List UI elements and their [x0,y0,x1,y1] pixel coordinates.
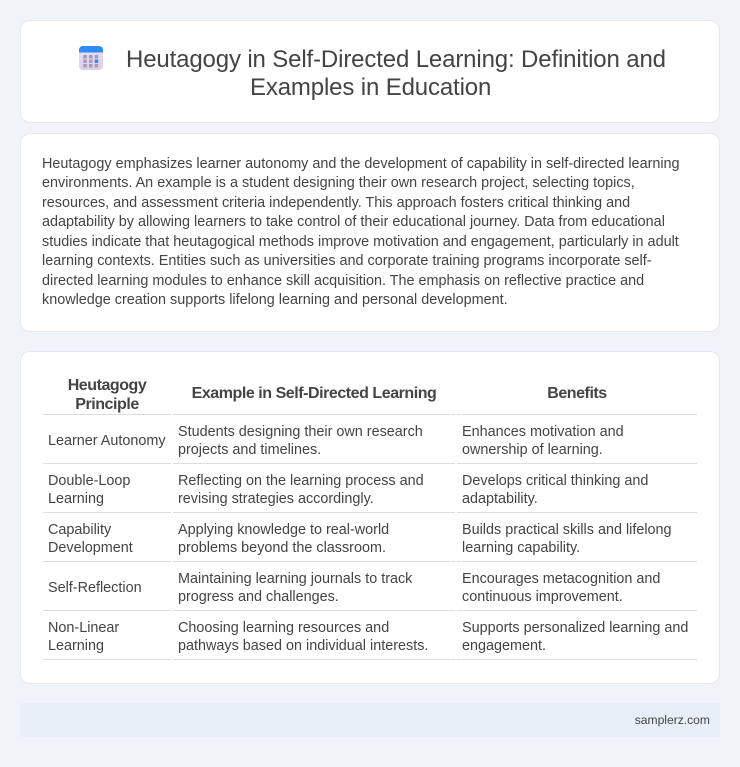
row: learner autonomy: Learner Autonomy [48,433,166,449]
row: self-reflection: Maintaining learning journals to track [178,571,412,587]
row: non-linear learning: Learning [48,638,104,654]
row: double-loop learning: adaptability. [462,491,538,507]
table panel [20,351,720,684]
intro paragraph: directed learning modules to enhance skill acquisition. The emphasis on reflective practice and [42,273,644,289]
row: double-loop learning: Develops critical thinking and [462,473,648,489]
row: self-reflection [48,571,660,605]
row: double-loop learning [48,473,648,507]
footer bar [20,703,720,737]
title: Examples in Education [250,74,491,101]
row: capability development: learning capability. [462,540,580,556]
row: self-reflection: progress and challenges. [178,589,339,605]
table header: Principle [75,396,139,413]
row: learner autonomy [48,424,624,458]
intro paragraph: environments. An example is a student designing their own research project, selecting topics, [42,175,635,191]
row: double-loop learning: Double-Loop [48,473,130,489]
intro paragraph: Heutagogy emphasizes learner autonomy and the development of capability in self-directed learning [42,156,680,172]
row: capability development [48,522,672,556]
table header: Example in Self-Directed Learning [192,385,436,402]
intro paragraph [42,156,680,308]
row: self-reflection: continuous improvement. [462,589,623,605]
row: non-linear learning: Supports personalized learning and [462,620,688,636]
row: non-linear learning: Choosing learning resources and [178,620,389,636]
row: learner autonomy: Students designing their own research [178,424,423,440]
intro paragraph: adaptability by allowing learners to take control of their educational journey. Data from educational [42,214,665,230]
row: learner autonomy: projects and timelines. [178,442,321,458]
intro paragraph: studies indicate that heutagogical methods improve motivation and engagement, particularly in adult [42,234,679,250]
row: non-linear learning: pathways based on individual interests. [178,638,428,654]
intro paragraph: resources, and assessment criteria independently. This approach fosters critical thinking and [42,195,630,211]
row: self-reflection: Encourages metacognition and [462,571,660,587]
intro panel [20,133,720,332]
row: capability development: Builds practical skills and lifelong [462,522,672,538]
row: double-loop learning: Reflecting on the learning process and [178,473,424,489]
table header [68,377,607,413]
row dividers [43,414,697,660]
row: capability development: Applying knowledge to real-world [178,522,389,538]
icon: calendar [79,46,103,70]
row: learner autonomy: Enhances motivation and [462,424,624,440]
row: non-linear learning: engagement. [462,638,546,654]
row: capability development: Capability [48,522,111,538]
table header: Heutagogy [68,377,146,394]
intro paragraph: learning contexts. Entities such as universities and corporate training programs incorporate self- [42,253,652,269]
table header: Benefits [547,385,607,402]
row: capability development: problems beyond the classroom. [178,540,386,556]
row: double-loop learning: revising strategies accordingly. [178,491,374,507]
row: non-linear learning: Non-Linear [48,620,119,636]
row: learner autonomy: ownership of learning. [462,442,603,458]
title [126,46,666,101]
intro paragraph: knowledge creation supports lifelong learning and personal development. [42,292,508,308]
row: non-linear learning [48,620,688,654]
title card [20,20,720,123]
row: double-loop learning: Learning [48,491,104,507]
row: capability development: Development [48,540,133,556]
row: self-reflection: Self-Reflection [48,580,142,596]
title: Heutagogy in Self-Directed Learning: Definition and [126,46,666,73]
footer source: samplerz.com [635,713,710,727]
